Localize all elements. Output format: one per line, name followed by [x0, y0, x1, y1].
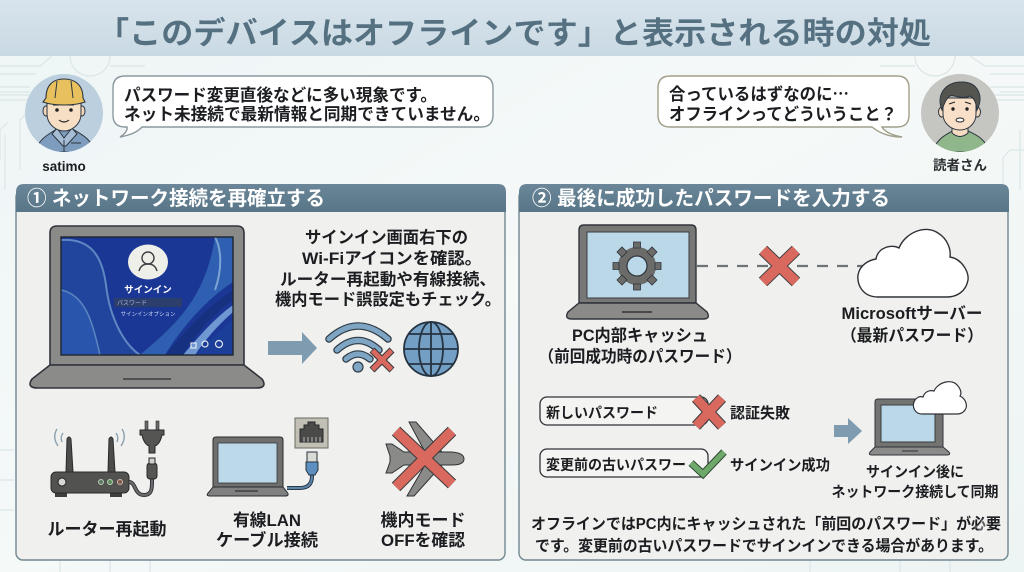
avatar: satimo — [25, 74, 103, 152]
icon: router — [51, 421, 164, 497]
screen icons — [191, 340, 222, 348]
title: 「このデバイスはオフラインです」と表示される時の対処 — [97, 16, 931, 51]
label: airplane mode: 機内モード — [380, 511, 466, 530]
label: pc cache: PC内部キャッシュ — [572, 326, 708, 345]
panel: step 1 — [16, 184, 506, 560]
label: sync after sign-in: ネットワーク接続して同期 — [832, 484, 998, 501]
icon: red x — [763, 250, 796, 282]
instructions text: Wi-Fiアイコンを確認。 — [302, 249, 482, 268]
label: airplane mode: OFFを確認 — [381, 531, 465, 550]
speech bubble: reader — [658, 76, 909, 137]
label: wired lan — [216, 511, 318, 550]
summary note — [531, 514, 1001, 555]
panel 1 header: ① ネットワーク接続を再確立する — [27, 187, 325, 210]
label: reader: 読者さん — [933, 157, 987, 173]
speech bubble: reader: オフラインってどういうこと？ — [669, 105, 897, 124]
dashed connection — [697, 265, 862, 267]
laptop with sign-in screen: パスワード — [117, 300, 147, 307]
row: old password succeeds: サインイン成功 — [730, 456, 830, 474]
row: old password succeeds — [540, 449, 830, 477]
instructions text: ルーター再起動や有線接続、 — [280, 270, 496, 289]
row: old password succeeds: 変更前の古いパスワー — [546, 456, 686, 474]
label: pc cache: （前回成功時のパスワード） — [538, 346, 742, 366]
instructions text: サインイン画面右下の — [305, 228, 468, 247]
icon: laptop with gear — [567, 225, 708, 319]
laptop with sign-in screen — [30, 226, 264, 388]
label: router restart: ルーター再起動 — [48, 520, 166, 539]
label: sync after sign-in: サインイン後に — [866, 463, 964, 481]
instructions text — [275, 228, 501, 309]
icon: wifi with x — [329, 326, 392, 372]
panel 2 header: ② 最後に成功したパスワードを入力する — [532, 186, 890, 210]
speech bubble: satimo: パスワード変更直後などに多い現象です。 — [124, 85, 437, 105]
speech bubble: satimo — [113, 76, 493, 137]
laptop with sign-in screen: サインイン — [124, 285, 172, 296]
panel: step 2 — [519, 184, 1009, 560]
avatar: reader — [921, 74, 999, 152]
summary note: です。変更前の古いパスワードでサインインできる場合があります。 — [535, 536, 993, 555]
label: pc cache — [538, 326, 742, 366]
label: airplane mode — [380, 511, 466, 550]
label: satimo: satimo — [42, 159, 86, 174]
label: wired lan: 有線LAN — [233, 511, 301, 530]
panel 1 header — [16, 184, 506, 212]
row: new password fails: 認証失敗 — [730, 404, 790, 422]
arrow — [834, 418, 862, 444]
label: microsoft server: （最新パスワード） — [841, 326, 983, 345]
row: new password fails: 新しいパスワード — [546, 405, 658, 422]
label: wired lan: ケーブル接続 — [216, 530, 318, 550]
icon: wired lan laptop — [207, 418, 328, 496]
row: new password fails — [540, 397, 790, 426]
instructions text: 機内モード誤設定もチェック。 — [275, 290, 501, 309]
speech bubble: satimo: ネット未接続で最新情報と同期できていません。 — [124, 105, 490, 124]
icon: airplane crossed out — [386, 422, 464, 496]
icon: globe — [404, 322, 458, 376]
label: microsoft server: Microsoftサーバー — [842, 304, 982, 323]
summary note: オフラインではPC内にキャッシュされた「前回のパスワード」が必要 — [531, 514, 1001, 533]
speech bubble: reader: 合っているはずなのに… — [669, 80, 849, 105]
arrow — [268, 332, 317, 364]
laptop with sign-in screen: サインインオプション — [120, 311, 176, 318]
panel 2 header — [519, 184, 1009, 212]
icon: laptop with cloud — [869, 382, 966, 455]
title — [0, 0, 1024, 56]
icon: cloud — [858, 229, 968, 297]
label: sync after sign-in — [832, 463, 998, 501]
label: microsoft server — [841, 304, 983, 345]
user icon — [128, 244, 168, 280]
